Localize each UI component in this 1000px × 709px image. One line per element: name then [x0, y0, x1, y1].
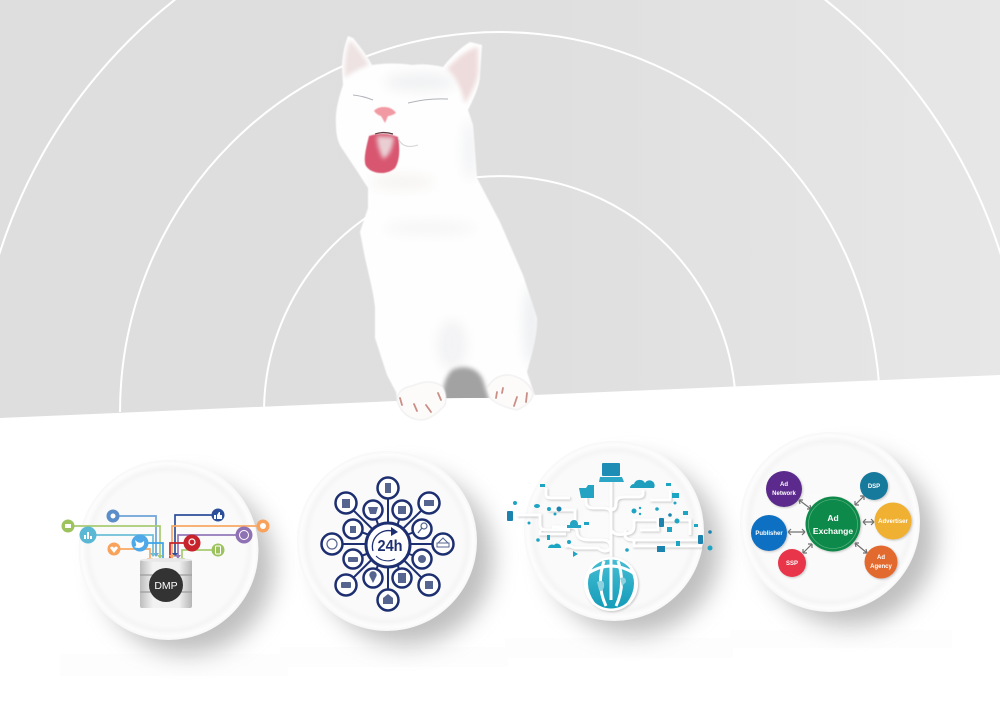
- DSP node: [860, 472, 888, 500]
- arrow heads: [147, 553, 185, 562]
- Ad Network node: [766, 471, 802, 507]
- chin fold: [398, 138, 418, 146]
- outer nodes: [322, 478, 454, 610]
- 24h hub: [366, 523, 410, 567]
- plate 4: ad exchange: [740, 432, 936, 626]
- plate 3: network tree: [507, 441, 720, 635]
- right paw: [487, 375, 533, 410]
- cat photo illustration: [336, 36, 540, 420]
- plate shadow: [546, 461, 720, 635]
- spokes: [332, 488, 443, 600]
- nose: [374, 107, 396, 123]
- plate disc: [740, 432, 920, 612]
- white lower panel: [0, 375, 1000, 709]
- double arrows: [788, 496, 874, 553]
- Advertiser node: Advertiser: [878, 519, 909, 525]
- left ear: [345, 41, 369, 78]
- plate disc: [297, 451, 477, 631]
- tree branches: [517, 480, 702, 565]
- plate disc: [524, 441, 704, 621]
- globe icon: [584, 557, 638, 611]
- source icons: [62, 508, 270, 556]
- Advertiser node: [874, 502, 912, 540]
- concentric white arcs: [0, 0, 1000, 412]
- tongue: [365, 134, 399, 173]
- faint bands under plates: [60, 630, 952, 676]
- node icons: [327, 483, 449, 604]
- SSP node: [778, 549, 806, 577]
- shadow between the legs: [443, 367, 490, 402]
- inner nodes: [344, 500, 432, 588]
- plate disc: [78, 460, 258, 640]
- plate shadow: [762, 452, 936, 626]
- database cylinder: DMP: [154, 580, 178, 592]
- Ad Agency node: [864, 546, 898, 578]
- Publisher node: [751, 515, 787, 551]
- tongue highlight: [377, 136, 394, 159]
- Ad Exchange hub: Ad: [827, 513, 839, 523]
- connector lines: [68, 515, 263, 558]
- mouth: [375, 132, 393, 134]
- plate 2: 24h commerce: [297, 451, 493, 645]
- plate 1: DMP: [62, 460, 274, 654]
- laptop icon: [599, 463, 624, 482]
- DSP node: DSP: [868, 484, 880, 490]
- plate shadow: [319, 471, 493, 645]
- paw toes: [400, 388, 527, 412]
- left paw: [397, 382, 446, 420]
- small device icons: [507, 483, 712, 557]
- Publisher node: Publisher: [755, 531, 783, 537]
- closed eyes: [353, 95, 448, 103]
- Ad Network node: Ad: [780, 482, 788, 488]
- 24h hub: 24h: [378, 538, 402, 555]
- Ad Exchange hub: [806, 496, 860, 552]
- plate shadow: [100, 480, 274, 654]
- fur shading: [381, 74, 536, 364]
- Ad Network node: Network: [772, 491, 796, 497]
- Ad Agency node: Agency: [870, 564, 892, 570]
- database cylinder: [140, 558, 192, 608]
- right ear: [447, 47, 478, 104]
- folder icon: [579, 485, 594, 498]
- Ad Agency node: Ad: [877, 555, 885, 561]
- Ad Exchange hub: Exchange: [813, 526, 853, 536]
- SSP node: SSP: [786, 561, 798, 567]
- gray backdrop: [0, 0, 1000, 420]
- cat body silhouette: [336, 36, 537, 420]
- cloud icon: [630, 480, 655, 488]
